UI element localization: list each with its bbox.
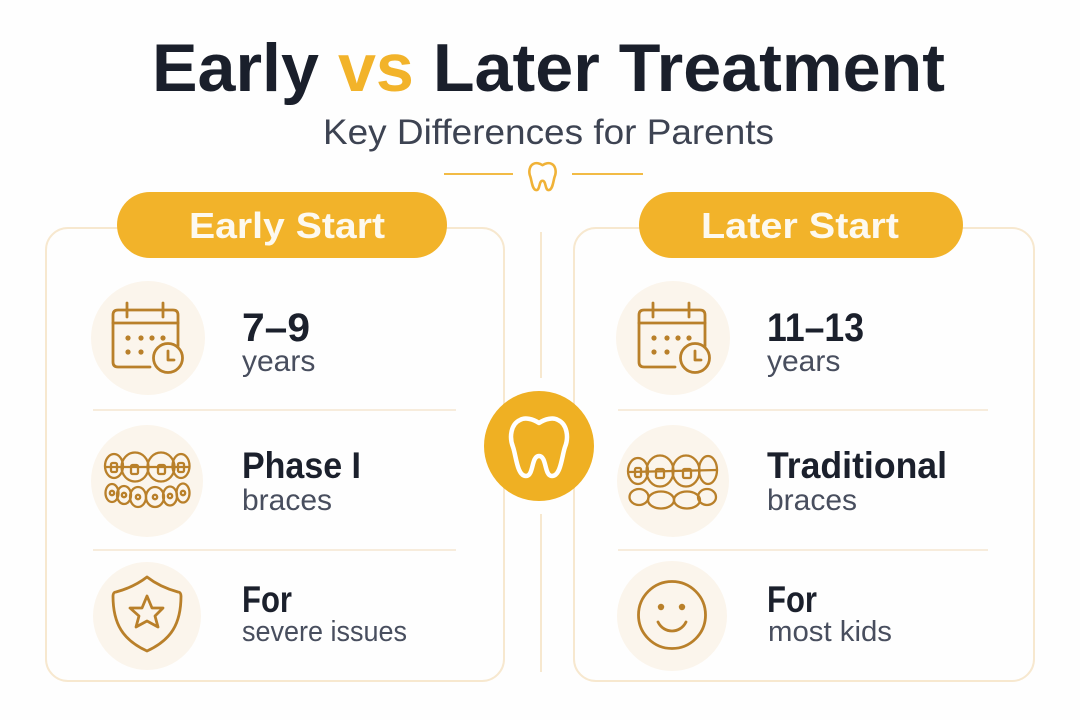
who text: For (242, 579, 292, 620)
treatment text (767, 445, 947, 517)
icon: calendar with clock (616, 281, 730, 395)
early start heading pill (117, 192, 447, 258)
early row: age (91, 281, 315, 395)
panel: early start (46, 192, 504, 681)
later row: who (617, 561, 892, 671)
who text: severe issues (242, 616, 407, 648)
age text: 7–9 (242, 306, 310, 350)
treatment text: braces (767, 484, 857, 517)
treatment text: braces (242, 484, 332, 517)
later row: treatment (617, 425, 947, 537)
later row: age (616, 281, 864, 395)
early row: treatment (91, 425, 361, 537)
panel: later start (574, 192, 1034, 681)
treatment text: Phase I (242, 445, 361, 486)
subtitle: Key Differences for Parents (323, 113, 774, 152)
who text (242, 579, 407, 648)
icon: shield with star (93, 562, 201, 670)
age text: years (767, 345, 840, 378)
age text (242, 306, 315, 378)
icon: calendar with clock (91, 281, 205, 395)
icon: central tooth badge (484, 391, 594, 501)
age text: years (242, 345, 315, 378)
early row: who (93, 562, 407, 670)
later start heading pill: Later Start (701, 205, 899, 246)
header divider with tooth icon (444, 163, 643, 190)
age text: 11–13 (767, 306, 864, 350)
later start heading pill (639, 192, 963, 258)
icon: traditional braces (617, 425, 729, 537)
treatment text: Traditional (767, 445, 947, 486)
center divider (540, 232, 542, 672)
title: Early vs Later Treatment (152, 30, 945, 106)
treatment text (242, 445, 361, 517)
early start heading pill: Early Start (189, 205, 385, 246)
icon: phase I braces (91, 425, 203, 537)
age text (767, 306, 864, 378)
who text: For (767, 579, 817, 620)
icon: smiley face (617, 561, 727, 671)
who text: most kids (768, 616, 892, 648)
who text (767, 579, 892, 648)
